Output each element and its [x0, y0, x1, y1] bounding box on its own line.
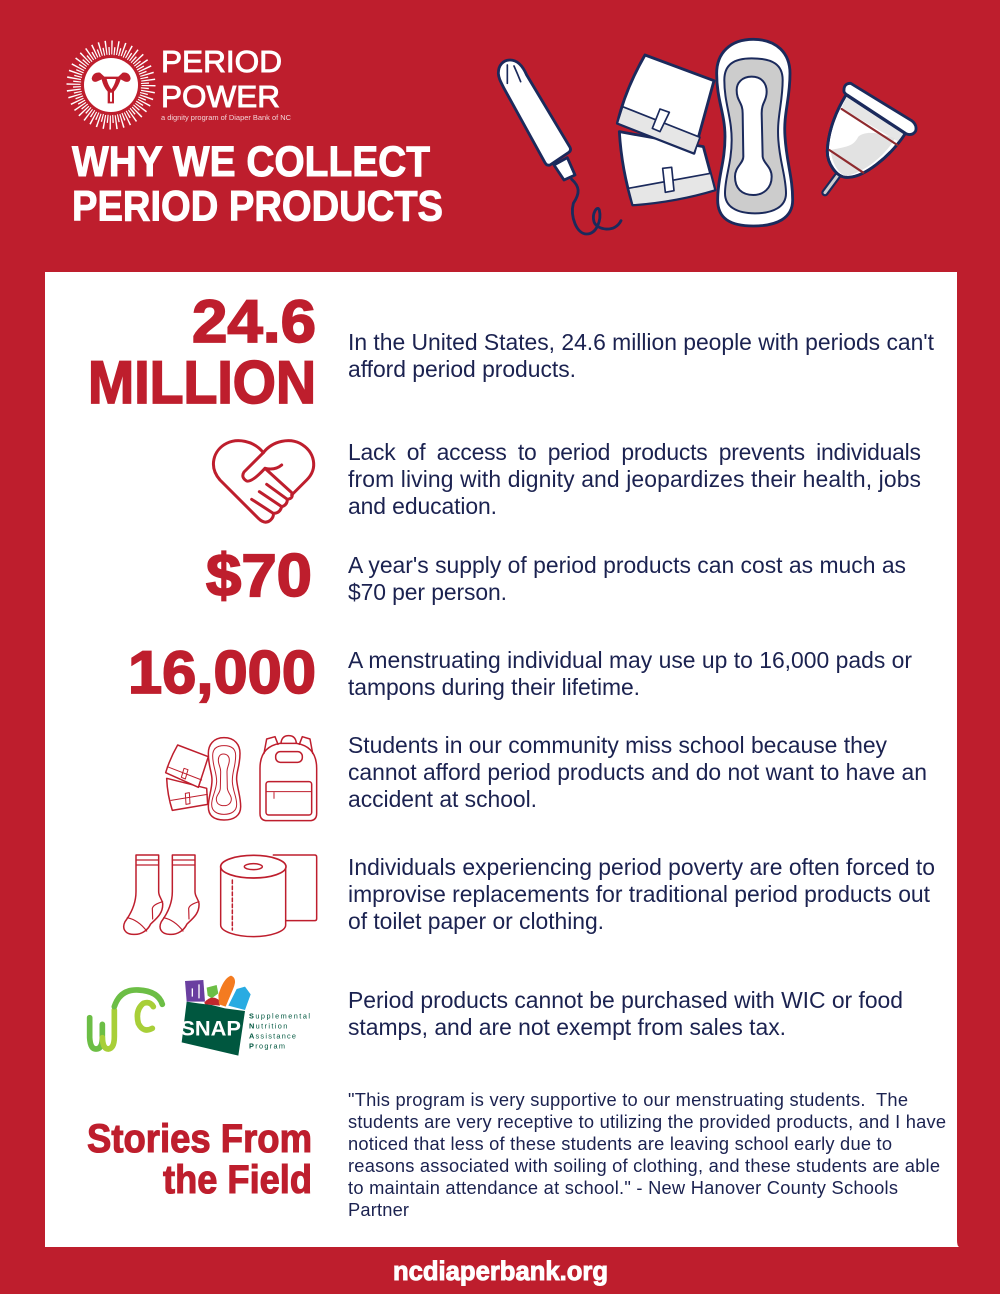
footer: website: ncdiaperbank.org	[393, 1256, 608, 1286]
icon: pads and backpack	[166, 736, 317, 821]
icon: menstrual cup	[825, 83, 916, 193]
quote: school partner: reasons associated with soiling of clothing, and these students are able	[348, 1155, 940, 1176]
title	[72, 138, 443, 230]
text: missing school: cannot afford period products and do not want to have an	[348, 759, 927, 785]
panel: main white card	[45, 272, 959, 1247]
stat: 24.6 million: MILLION	[88, 349, 316, 416]
icon: socks	[124, 855, 199, 934]
quote: school partner: Partner	[348, 1199, 409, 1220]
icon: wrapped pads	[617, 55, 715, 205]
stat: $70: $70	[206, 542, 312, 609]
quote: school partner: "This program is very supportive to our menstruating students. The	[348, 1089, 908, 1110]
heading: stories from the field: Stories From	[87, 1117, 312, 1161]
stat: 24.6 million: 24.6	[192, 288, 316, 355]
text: dignity	[348, 439, 921, 519]
quote: school partner: students are very receptive to utilizing the provided products, and I have	[348, 1111, 946, 1132]
text: WIC and food stamps: Period products cannot be purchased with WIC or food	[348, 987, 903, 1013]
icon: pad outline	[208, 738, 241, 820]
text: improvised replacements: improvise replacements for traditional period products out	[348, 881, 931, 907]
logo: SNAP: Nutrition	[249, 1021, 287, 1030]
text: lifetime use: tampons during their lifetime.	[348, 674, 640, 700]
icon: tampon	[498, 60, 621, 234]
icon: toilet paper	[221, 855, 317, 937]
icon: pad	[717, 39, 793, 226]
logo: SNAP: Program	[249, 1041, 285, 1050]
logo: SNAP: Supplemental	[249, 1011, 310, 1020]
text: missing school	[348, 732, 927, 812]
logo: WIC	[90, 990, 162, 1049]
text: yearly cost: A year's supply of period products can cost as much as	[348, 552, 906, 578]
title: PERIOD PRODUCTS	[72, 182, 443, 230]
illustration: period products	[498, 39, 916, 234]
title: WHY WE COLLECT	[72, 138, 430, 186]
logo wordmark: PERIOD	[161, 44, 282, 79]
text: dignity: and education.	[348, 493, 497, 519]
text: 24.6 million: afford period products.	[348, 356, 576, 382]
text: improvised replacements	[348, 854, 935, 934]
text: yearly cost: $70 per person.	[348, 579, 507, 605]
icon: sunburst with uterus	[74, 48, 148, 122]
text: yearly cost	[348, 552, 906, 605]
quote: school partner: noticed that less of these students are leaving school early due to	[348, 1133, 892, 1154]
icon: heart handshake	[213, 441, 314, 522]
text: lifetime use	[348, 647, 912, 700]
text: missing school: Students in our community miss school because they	[348, 732, 888, 758]
text: 24.6 million: In the United States, 24.6 million people with periods can't	[348, 329, 935, 355]
logo: SNAP	[180, 976, 310, 1056]
stat: 24.6 million	[88, 288, 316, 416]
text: WIC and food stamps	[348, 987, 903, 1040]
logo wordmark: POWER	[161, 79, 280, 114]
text: dignity: Lack of access to period products prevents individuals	[348, 439, 921, 465]
text: lifetime use: A menstruating individual may use up to 16,000 pads or	[348, 647, 912, 673]
quote: school partner	[348, 1089, 946, 1220]
text: WIC and food stamps: stamps, and are not exempt from sales tax.	[348, 1014, 786, 1040]
heading: stories from the field	[87, 1117, 312, 1202]
icon: wrapped pads outline	[166, 745, 208, 810]
text: improvised replacements: Individuals experiencing period poverty are often forced to	[348, 854, 935, 880]
logos: WIC and SNAP	[90, 976, 310, 1056]
quote: school partner: to maintain attendance at school." - New Hanover County Schools	[348, 1177, 898, 1198]
icon: backpack	[260, 736, 317, 821]
icon: socks and toilet paper	[124, 855, 317, 937]
logo: Period Power	[74, 44, 292, 122]
text: missing school: accident at school.	[348, 786, 537, 812]
logo wordmark	[161, 44, 292, 122]
text: improvised replacements: of toilet paper or clothing.	[348, 908, 604, 934]
logo: SNAP: SNAP	[180, 1016, 241, 1041]
stat: 16,000: 16,000	[128, 639, 316, 706]
logo: SNAP: Assistance	[249, 1031, 296, 1040]
heading: stories from the field: the Field	[163, 1158, 312, 1202]
text: dignity: from living with dignity and jeopardizes their health, jobs	[348, 466, 921, 492]
text: 24.6 million	[348, 329, 935, 382]
logo wordmark: a dignity program of Diaper Bank of NC	[161, 113, 292, 122]
